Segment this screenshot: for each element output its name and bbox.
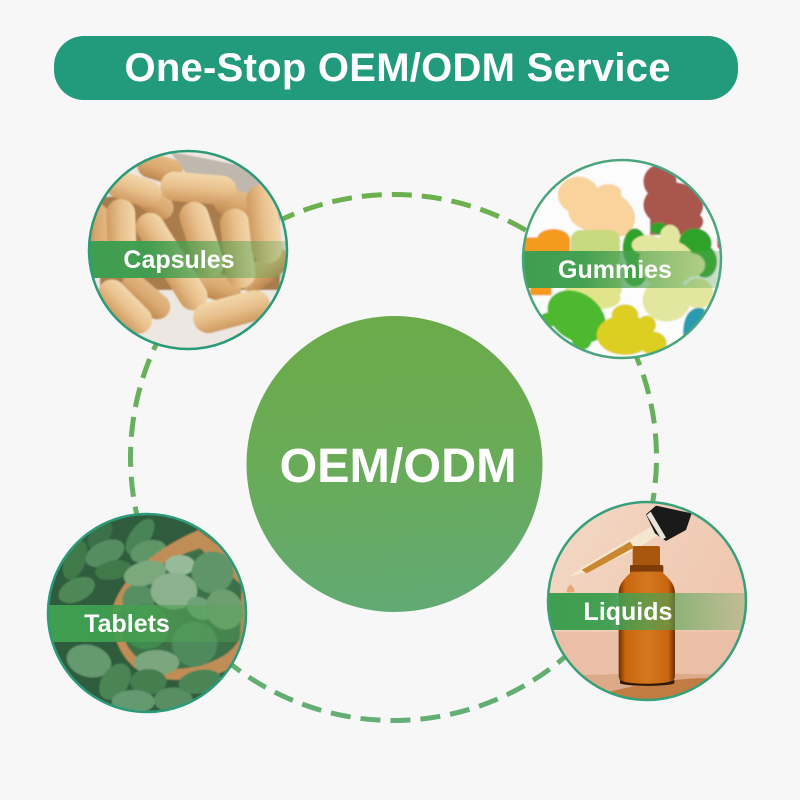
capsules photo illustration: [90, 152, 286, 348]
tablets label: Tablets: [84, 610, 170, 638]
center disc: [246, 316, 542, 612]
banner pill: [54, 36, 738, 100]
tablets photo illustration: [49, 515, 245, 711]
gummies label band: [523, 251, 721, 288]
center label: OEM/ODM: [279, 439, 517, 493]
center circle: OEM/ODM: [246, 316, 542, 612]
product circle: liquids: [547, 498, 753, 708]
dashed connecting ring: [130, 194, 656, 720]
liquids label band: [548, 593, 746, 630]
gummies ring: [523, 160, 721, 358]
product circle: gummies: [517, 157, 730, 363]
title banner: [54, 36, 738, 100]
liquids photo illustration: [550, 503, 745, 699]
title text: One-Stop OEM/ODM Service: [124, 46, 670, 90]
capsules ring: [89, 151, 287, 349]
capsules label: Capsules: [123, 246, 235, 274]
liquids label: Liquids: [584, 598, 672, 626]
gummies photo illustration: [524, 166, 720, 356]
gummies label: Gummies: [558, 256, 672, 284]
liquids ring: [548, 502, 746, 700]
tablets label band: [48, 605, 246, 642]
product circle: tablets: [47, 512, 253, 718]
capsules label band: [89, 241, 287, 278]
product circle: capsules: [83, 147, 295, 353]
tablets ring: [48, 514, 246, 712]
